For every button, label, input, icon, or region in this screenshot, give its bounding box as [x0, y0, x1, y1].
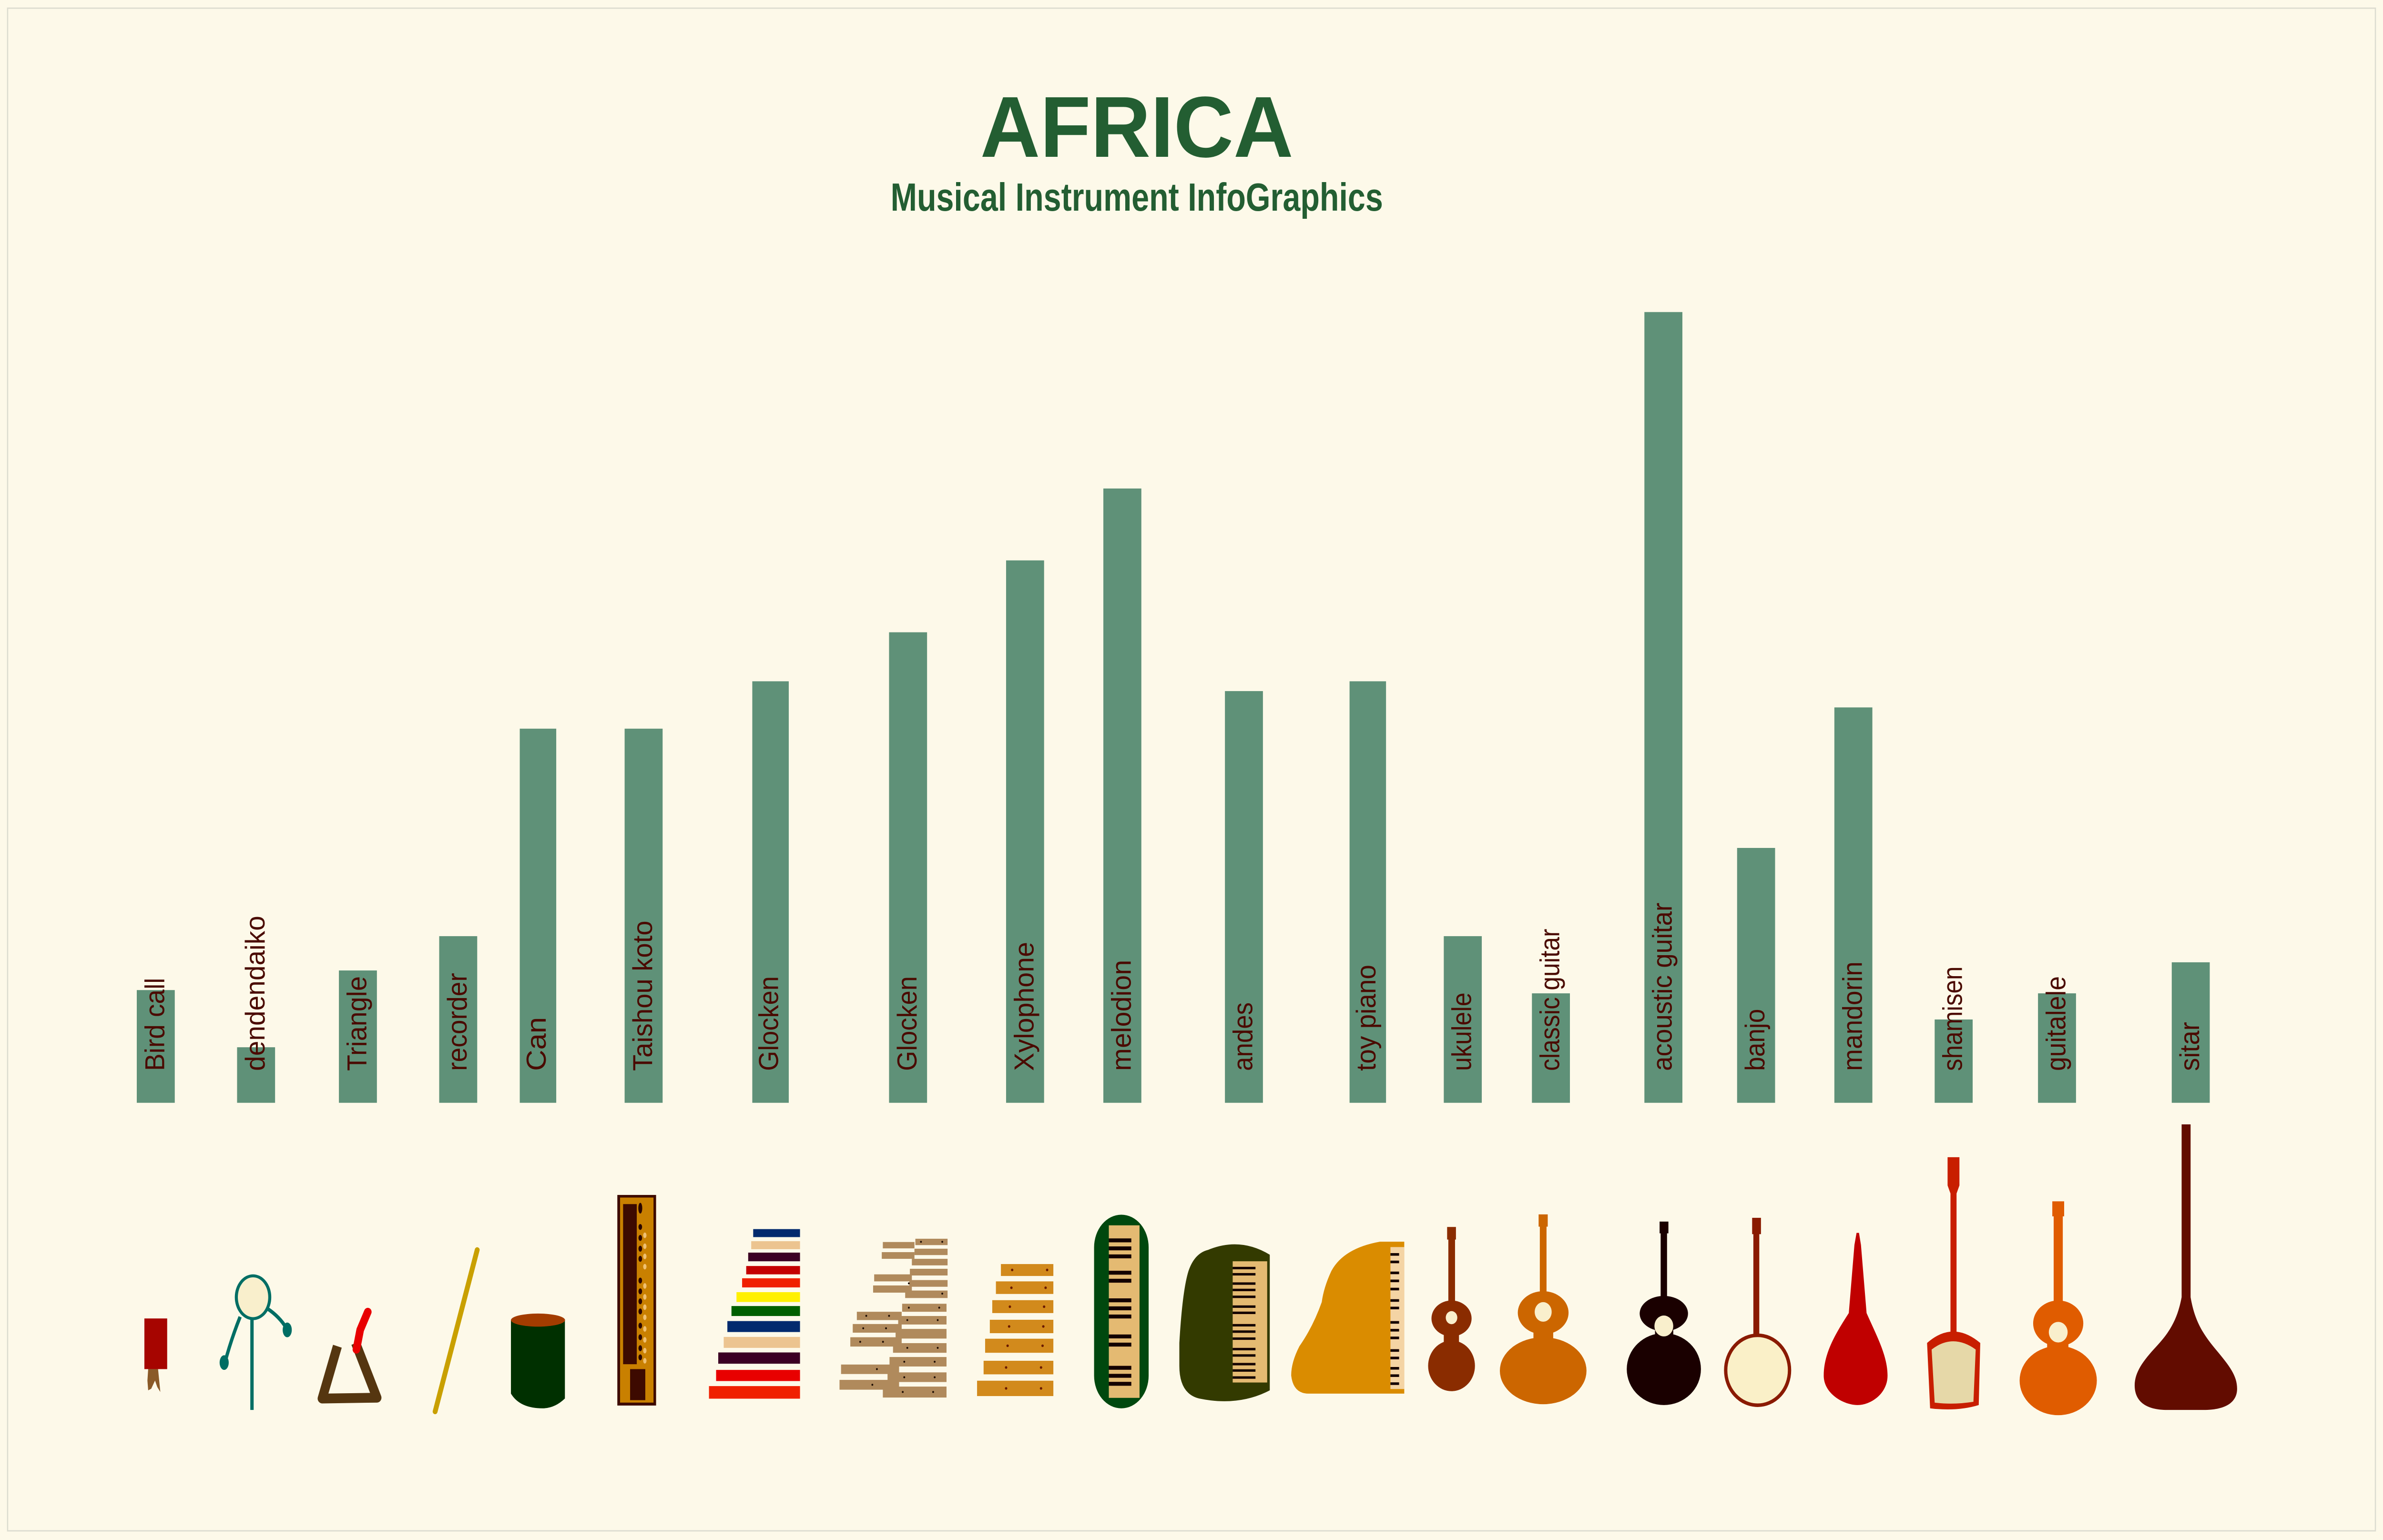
bar labels: guitalele	[2041, 976, 2071, 1071]
icon: xylophone	[977, 1264, 1053, 1396]
bar labels: Triangle	[341, 976, 372, 1071]
icon: glocken 2	[839, 1239, 947, 1397]
icon: shamisen	[1927, 1157, 1980, 1409]
subtitle: Musical Instrument InfoGraphics	[891, 175, 1383, 219]
bar labels: Glocken	[892, 976, 922, 1071]
icon: banjo	[1726, 1218, 1790, 1405]
title: AFRICA	[980, 79, 1293, 175]
bar chart	[137, 312, 2210, 1103]
bar labels: sitar	[2174, 1022, 2205, 1071]
icon: recorder	[435, 1250, 477, 1412]
bar labels: banjo	[1740, 1009, 1771, 1071]
icon: glocken 1	[709, 1229, 800, 1398]
icon: andes	[1179, 1244, 1270, 1401]
icon: ukulele	[1428, 1227, 1475, 1391]
bar labels: shamisen	[1937, 967, 1968, 1071]
bar labels: dendendaiko	[240, 916, 270, 1071]
bar labels: Xylophone	[1008, 942, 1039, 1071]
icon: acoustic guitar	[1627, 1222, 1701, 1405]
bar labels: Bird call	[139, 978, 170, 1071]
bar labels: classic guitar	[1535, 929, 1565, 1071]
bar labels: ukulele	[1446, 992, 1477, 1071]
icon: bird call	[144, 1318, 167, 1392]
bar labels: Taishou koto	[627, 921, 658, 1071]
bar labels: acoustic guitar	[1647, 903, 1678, 1071]
bar labels: andes	[1228, 1002, 1258, 1071]
bar labels	[139, 903, 2205, 1071]
icon: melodion	[1094, 1215, 1149, 1408]
icon: sitar	[2135, 1124, 2237, 1410]
icon: toy piano	[1291, 1242, 1404, 1394]
icon: dendendaiko	[220, 1275, 292, 1410]
bar labels: recorder	[442, 973, 472, 1071]
icon: classic guitar	[1500, 1214, 1587, 1404]
bar labels: mandorin	[1837, 961, 1868, 1071]
bar labels: Can	[521, 1017, 551, 1071]
icon: mandorin	[1824, 1233, 1887, 1405]
bar labels: Glocken	[754, 976, 784, 1071]
icon: guitalele	[2020, 1201, 2097, 1415]
icon: taishou koto	[617, 1195, 656, 1406]
icon: triangle	[322, 1312, 377, 1398]
bar labels: toy piano	[1351, 965, 1381, 1071]
bar labels: melodion	[1106, 960, 1137, 1071]
icon: can	[511, 1314, 565, 1408]
